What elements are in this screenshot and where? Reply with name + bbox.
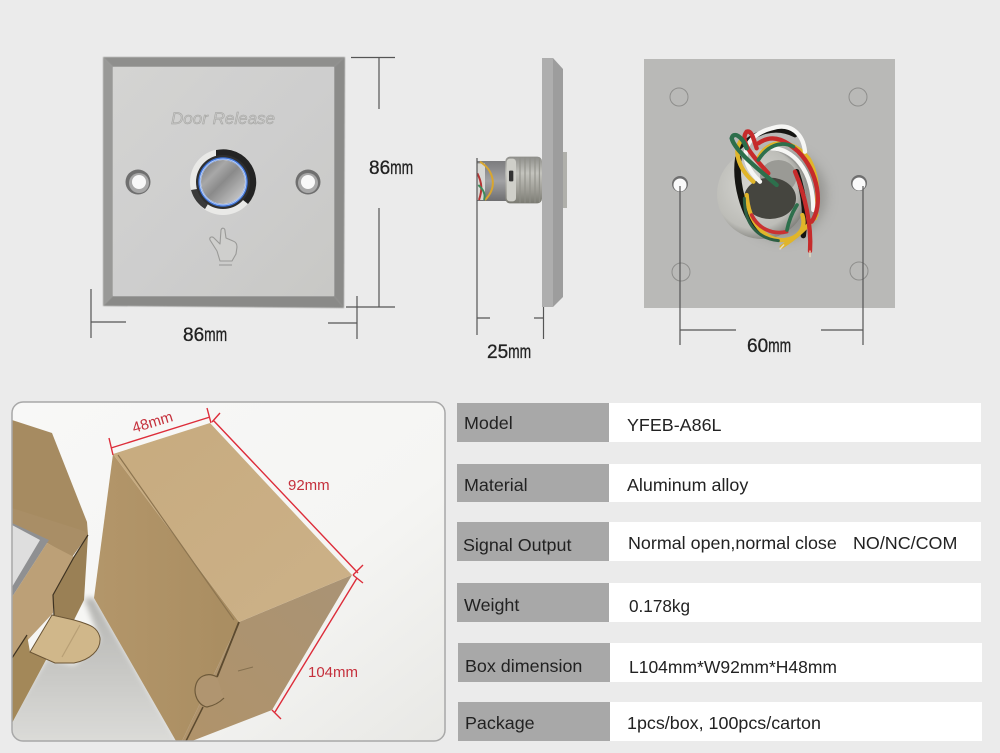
panel: packaging box photo: [8, 402, 445, 745]
dimension lines: side view: [477, 158, 544, 339]
embossed circles: [670, 88, 868, 281]
label: 92mm: 92mm: [288, 477, 330, 494]
illuminated push button: [190, 149, 256, 215]
dimension lines: front view: [91, 57, 395, 339]
embossed Door Release text: Door Release: [171, 109, 275, 128]
label: 104mm: 104mm: [308, 664, 358, 681]
open box on the left: [12, 420, 100, 723]
row: package: 1pcs/box, 100pcs/carton: [627, 713, 821, 733]
row: signal output: Signal Output: [463, 535, 571, 555]
tab: [30, 615, 100, 663]
label: 48mm: 48mm: [130, 408, 175, 437]
row: box dimension: [458, 643, 982, 682]
label: 86mm height: 86mm: [369, 158, 413, 179]
label: 60mm: 60mm: [747, 336, 791, 357]
red measurement lines: [109, 408, 363, 719]
row: material: Material: [464, 475, 528, 495]
soft shadow on the surface: [8, 598, 180, 745]
plate face: [113, 67, 334, 296]
wire bundle and dark button body: [732, 127, 818, 257]
closed box: top face: [113, 423, 352, 622]
row: model: YFEB-A86L: [627, 415, 722, 435]
label: 86mm width: 86mm: [183, 325, 227, 346]
back view of the plate: [644, 59, 895, 308]
row: weight: 0.178kg: [629, 596, 690, 616]
plate bevels: [103, 57, 345, 308]
closed box: locking tab: [195, 675, 224, 707]
side view of the button: [477, 58, 567, 307]
front button nub: [563, 152, 567, 208]
row: material: Aluminum alloy: [627, 475, 748, 495]
front view of the door release plate: [103, 57, 345, 308]
dome of the button: [717, 149, 807, 239]
row: material: [457, 464, 981, 502]
row: weight: [457, 583, 981, 622]
metal plate inside: [12, 523, 49, 597]
row: signal output: NO/NC/COM: [853, 533, 957, 553]
plate edge: [542, 58, 563, 307]
icon: pointing hand: [210, 228, 237, 265]
row: package: [458, 702, 982, 741]
label: 25mm: 25mm: [487, 342, 531, 363]
row: package: Package: [465, 713, 535, 733]
shadow under wires: [738, 151, 826, 239]
closed box: right face: [182, 575, 352, 741]
dimension lines: back view: [680, 186, 863, 345]
row: model: Model: [464, 413, 513, 433]
box floor: [12, 543, 74, 657]
back plate: [644, 59, 895, 308]
row: signal output: Normal open,normal close: [628, 533, 837, 553]
threaded bolt: [505, 157, 542, 203]
photo background: [12, 402, 445, 741]
closed box: left face: [94, 454, 239, 741]
right wall: [53, 535, 88, 620]
folded band: [48, 542, 83, 556]
mounting holes: [672, 175, 867, 192]
row: model: [457, 403, 981, 442]
row: box dimension: Box dimension: [465, 656, 582, 676]
front wall: [12, 635, 47, 723]
specification table: [457, 403, 982, 741]
panel border: [12, 402, 445, 741]
closed box: fold crease: [118, 455, 234, 620]
row: weight: Weight: [464, 595, 519, 615]
back flap: [12, 420, 88, 557]
wire tube: [477, 161, 510, 201]
right screw hole: [296, 170, 320, 194]
left screw hole: [126, 170, 150, 194]
row: box dimension: L104mm*W92mm*H48mm: [629, 657, 837, 677]
row: signal output: [457, 522, 981, 561]
